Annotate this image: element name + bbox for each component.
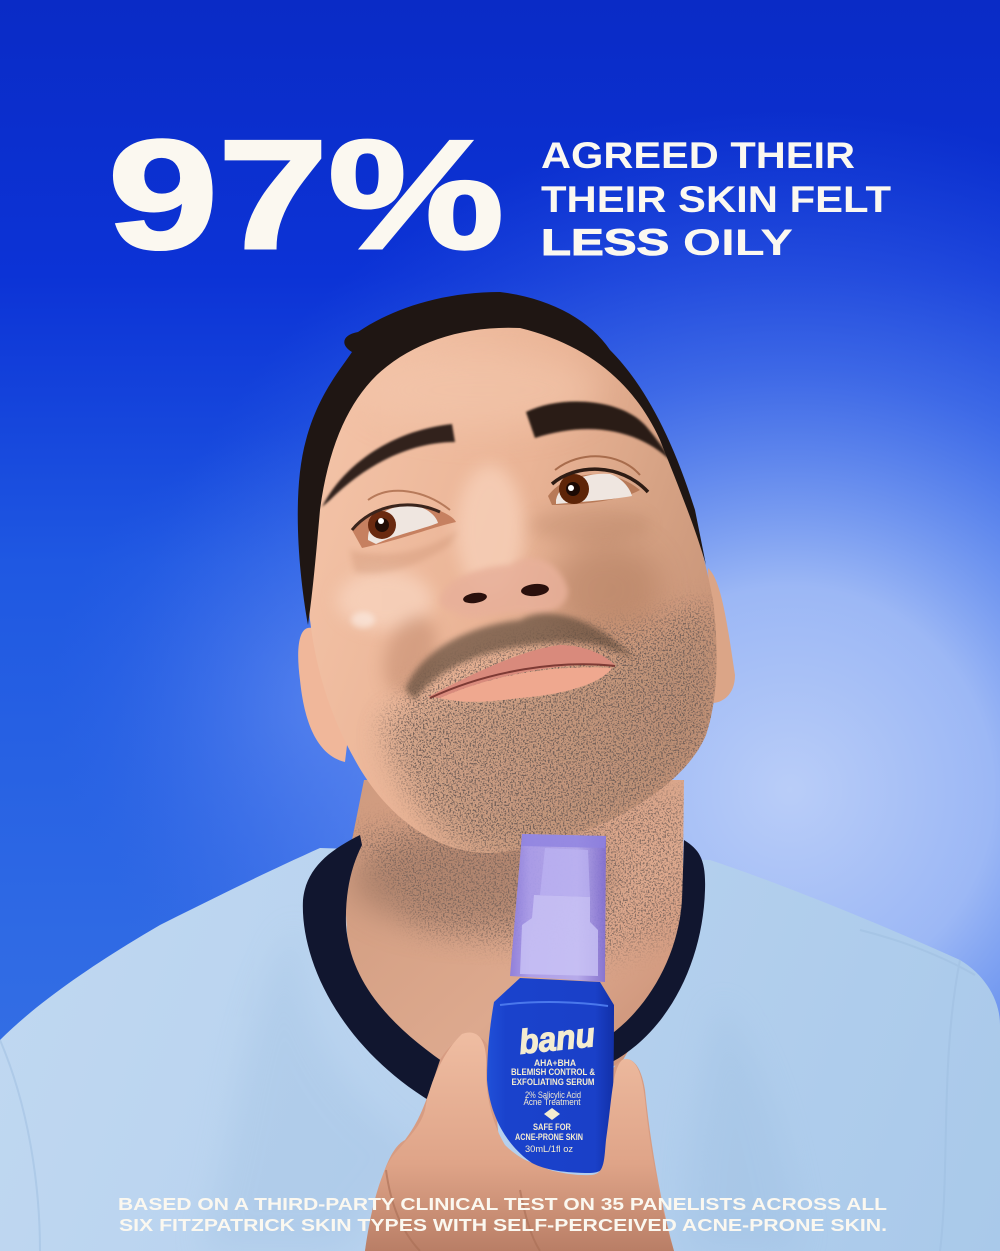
left ear (298, 628, 350, 762)
label text (511, 1058, 595, 1154)
collar (303, 835, 705, 1107)
serum bottle (487, 834, 614, 1173)
head (298, 292, 735, 855)
pump cap (510, 834, 606, 982)
headline description: THEIR SKIN FELT (541, 179, 891, 220)
headline stat: 97% (108, 108, 504, 281)
diamond icon (544, 1108, 560, 1120)
label text: SAFE FOR (533, 1122, 571, 1132)
face shading (337, 350, 716, 855)
headline description (541, 135, 891, 263)
left eye (352, 491, 456, 548)
label text: 2% Salicylic Acid (525, 1090, 581, 1100)
t-shirt (0, 848, 1000, 1251)
face shape (307, 316, 717, 853)
label text: EXFOLIATING SERUM (512, 1077, 594, 1087)
right eyebrow (526, 401, 672, 462)
footnote: SIX FITZPATRICK SKIN TYPES WITH SELF-PERCEIVED ACNE-PRONE SKIN. (119, 1215, 887, 1235)
bottle body (487, 978, 614, 1173)
neck (344, 780, 690, 1090)
footnote: BASED ON A THIRD-PARTY CLINICAL TEST ON 35 PANELISTS ACROSS ALL (118, 1194, 887, 1214)
right eye (548, 456, 648, 505)
label text: ACNE-PRONE SKIN (515, 1132, 583, 1142)
bottle highlight (500, 1002, 608, 1006)
lips (428, 645, 615, 702)
label text: 30mL/1fl oz (525, 1144, 574, 1154)
footnote (118, 1194, 887, 1235)
stubble specks (385, 604, 716, 855)
headline description: LESS OILY (541, 222, 793, 263)
brand logo: banu (517, 1016, 597, 1062)
headline description: AGREED THEIR (541, 135, 855, 176)
moustache (405, 613, 635, 700)
stubble shading (385, 623, 716, 855)
hand back fingers (365, 1036, 674, 1251)
label text: AHA+BHA (534, 1058, 576, 1068)
label text: BLEMISH CONTROL & (511, 1067, 595, 1077)
right ear (708, 568, 735, 703)
hand front (365, 1032, 674, 1251)
left eyebrow (322, 424, 455, 507)
hair (298, 292, 706, 625)
label text: Acne Treatment (524, 1097, 581, 1107)
nose (440, 558, 568, 618)
